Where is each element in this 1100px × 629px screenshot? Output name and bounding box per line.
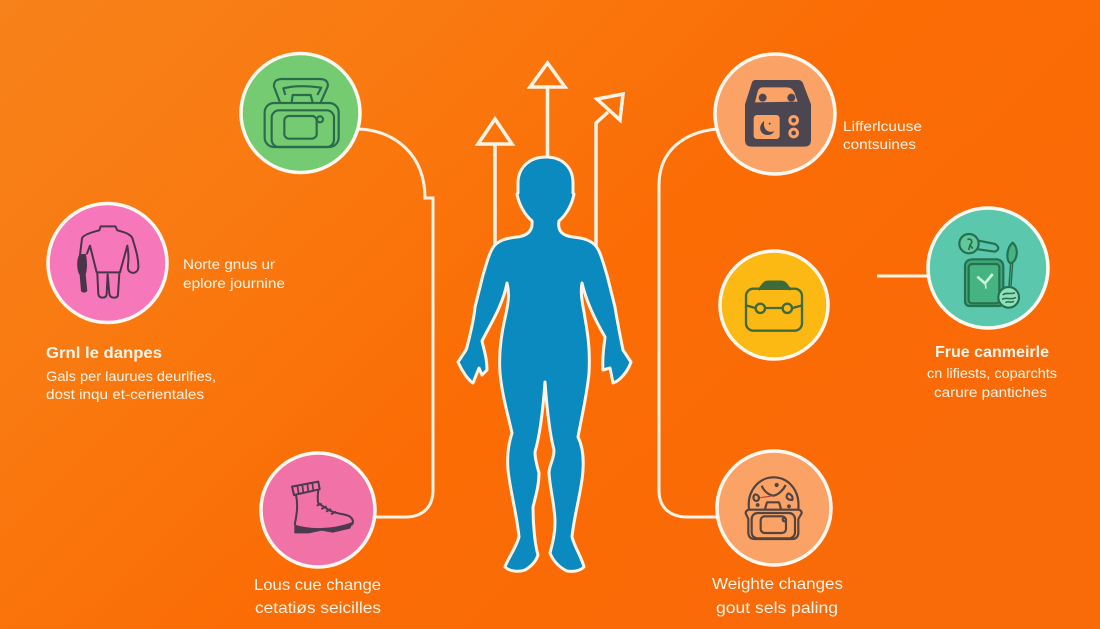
- text block: right heading and description: [927, 344, 1057, 400]
- text block: right heading and description: carure pantiches: [934, 384, 1047, 400]
- text block: lower right caption: [712, 576, 843, 617]
- text block: boot caption: cetatiøs seicilles: [255, 600, 381, 617]
- icon: briefcase: [746, 282, 802, 331]
- connector: teal circle line: [877, 274, 929, 278]
- connector: green circle to boot circle: [358, 129, 433, 517]
- icon: device box: [745, 80, 811, 147]
- connector: peach circle to lower peach circle: [659, 129, 717, 517]
- text: top right note: Lifferlcuuse: [843, 118, 922, 134]
- text: top right note: [843, 118, 922, 152]
- human body silhouette: [458, 157, 631, 571]
- text block: left heading and description: [46, 345, 216, 402]
- circle: peach with device icon: [715, 54, 835, 174]
- text block: right heading and description: Frue canmeirle: [935, 344, 1049, 361]
- circle: pink with garment icon: [48, 204, 167, 322]
- icon: torso garment: [77, 226, 138, 298]
- text: left middle note: eplore journine: [183, 275, 285, 291]
- arrow: right diagonal: [596, 94, 623, 248]
- circle: teal with checklist icon: [928, 208, 1048, 328]
- icon: boot: [292, 482, 353, 533]
- text block: lower right caption: gout sels paling: [716, 600, 838, 617]
- text block: boot caption: [254, 577, 381, 617]
- circle: green with bag icon: [241, 54, 360, 172]
- text: top right note: contsuines: [843, 136, 916, 152]
- circle: peach with backpack icon: [717, 451, 831, 565]
- text block: left heading and description: Gals per laurues deurlfies,: [46, 368, 216, 384]
- text: left middle note: [183, 256, 285, 291]
- arrow: left upward: [478, 119, 512, 248]
- text block: lower right caption: Weighte changes: [712, 576, 843, 593]
- icon: jar and tools: [959, 234, 1019, 308]
- text block: right heading and description: cn lifiests, coparchts: [927, 365, 1057, 381]
- text block: left heading and description: dost inqu et-cerientales: [46, 386, 204, 402]
- icon: bag: [265, 79, 339, 147]
- arrow: centre upward: [530, 63, 565, 160]
- text block: boot caption: Lous cue change: [254, 577, 381, 594]
- icon: backpack with dome: [746, 477, 802, 539]
- text block: left heading and description: Grnl le danpes: [46, 345, 162, 362]
- circle: pink with boot icon: [261, 453, 375, 567]
- text: left middle note: Norte gnus ur: [183, 256, 275, 272]
- circle: yellow with briefcase icon: [720, 251, 828, 359]
